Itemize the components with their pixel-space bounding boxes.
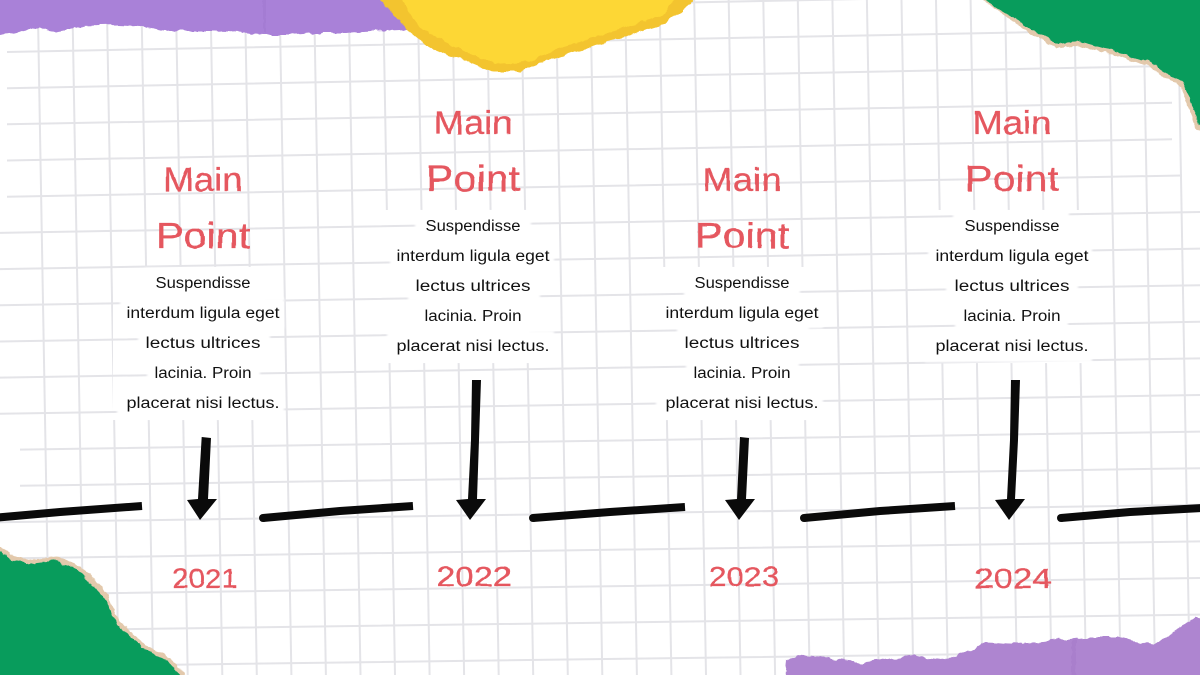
column 4: 2024 <box>936 104 1089 594</box>
body text 2024: placerat nisi lectus. <box>936 338 1088 355</box>
heading: main point 2023: Main <box>702 161 782 198</box>
year 2022: 2022 <box>436 561 512 592</box>
body text 2023: placerat nisi lectus. <box>666 395 818 412</box>
heading: main point 2021: Point <box>156 215 250 256</box>
heading: main point 2022 <box>426 104 520 199</box>
white erasure per text line <box>117 211 1092 419</box>
body text 2021: placerat nisi lectus. <box>126 395 280 412</box>
arrow 2022 <box>456 380 486 520</box>
torn paper: purple top <box>0 0 415 35</box>
body text 2021: interdum ligula eget <box>126 305 280 322</box>
body text 2024: Suspendisse <box>964 218 1060 235</box>
body text 2021: lacinia. Proin <box>154 365 252 382</box>
column 1: 2021 <box>126 161 280 594</box>
body text 2023: interdum ligula eget <box>666 305 819 322</box>
arrow 2023 <box>725 437 755 520</box>
column 3: 2023 <box>666 161 819 592</box>
body text 2023: Suspendisse <box>694 275 790 292</box>
heading: main point 2022: Point <box>426 158 520 199</box>
body text 2024: lacinia. Proin <box>964 308 1060 325</box>
body text 2022: lectus ultrices <box>416 278 531 295</box>
body text 2023 <box>666 275 819 412</box>
heading: main point 2023: Point <box>695 215 789 256</box>
torn paper: green top right <box>980 0 1200 135</box>
year 2021: 2021 <box>172 563 238 594</box>
white erasure behind text blocks <box>113 210 1091 420</box>
heading: main point 2024: Point <box>965 158 1059 199</box>
heading: main point 2022: Main <box>434 104 512 141</box>
heading: main point 2021: Main <box>164 161 242 198</box>
body text 2024: interdum ligula eget <box>936 248 1089 265</box>
body text 2022: lacinia. Proin <box>424 308 522 325</box>
body text 2021: Suspendisse <box>156 275 250 292</box>
body text 2023: lectus ultrices <box>684 335 800 352</box>
body text 2022 <box>396 218 550 355</box>
year 2023: 2023 <box>709 561 779 592</box>
year 2024: 2024 <box>974 563 1052 594</box>
heading: main point 2021 <box>156 161 250 256</box>
arrow 2024 <box>995 380 1025 520</box>
torn paper: purple bottom right <box>783 617 1200 675</box>
arrow 2021 <box>187 437 217 520</box>
body text 2024: lectus ultrices <box>954 278 1070 295</box>
body text 2022: placerat nisi lectus. <box>396 338 550 355</box>
body text 2022: interdum ligula eget <box>396 248 550 265</box>
body text 2024 <box>936 218 1089 355</box>
body text 2021 <box>126 275 280 412</box>
heading: main point 2024: Main <box>972 104 1052 141</box>
heading: main point 2023 <box>695 161 789 256</box>
body text 2022: Suspendisse <box>426 218 520 235</box>
torn paper: green bottom left <box>0 546 186 675</box>
torn paper: yellow top <box>378 0 700 72</box>
timeline segments <box>0 506 1200 522</box>
heading: main point 2024 <box>965 104 1059 199</box>
body text 2021: lectus ultrices <box>146 335 261 352</box>
column 2: 2022 <box>396 104 550 592</box>
body text 2023: lacinia. Proin <box>694 365 790 382</box>
